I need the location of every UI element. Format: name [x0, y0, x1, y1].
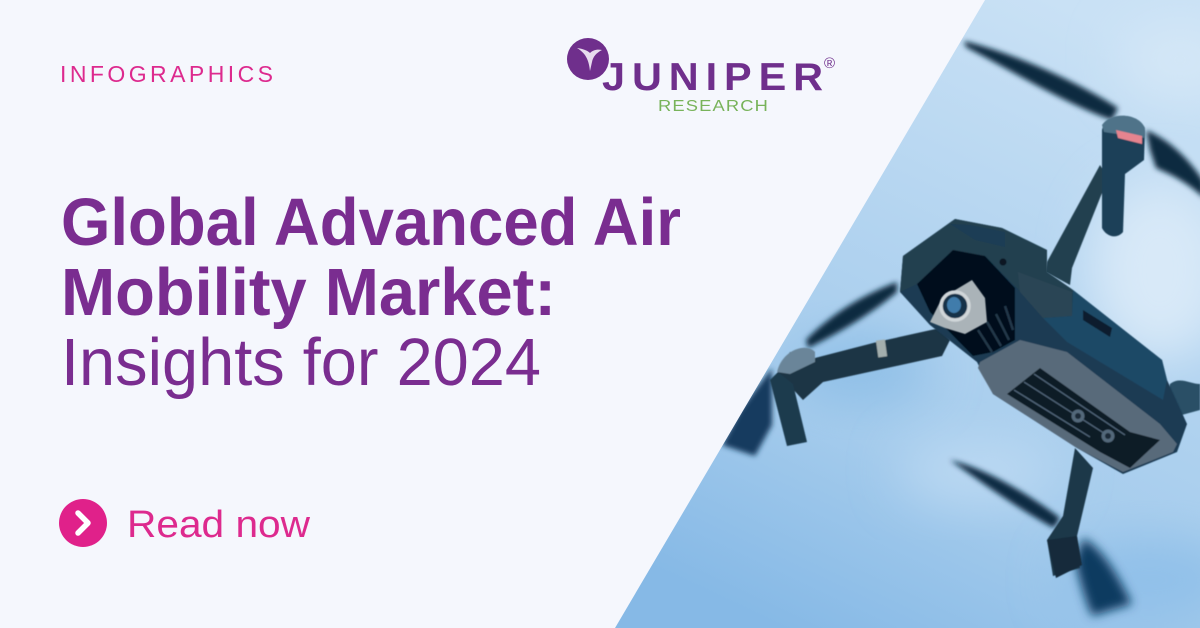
- panel: drone photo: [600, 0, 1200, 628]
- top shell: [900, 218, 1072, 291]
- blade bottom: [950, 460, 1060, 528]
- blade right: [1146, 130, 1200, 198]
- propeller blades, blurred: [722, 41, 1200, 616]
- drone body: [900, 219, 1187, 474]
- grille: [1007, 368, 1160, 468]
- title line 2: Mobility Market:: [61, 255, 556, 330]
- registered mark: ®: [824, 55, 835, 72]
- title: [61, 185, 681, 400]
- drone arms and motors: [770, 116, 1200, 578]
- label: infographics: INFOGRAPHICS: [60, 61, 273, 87]
- blade lower left: [722, 368, 772, 456]
- bottom plate: [978, 340, 1177, 472]
- blade left: [806, 282, 897, 348]
- read now link: Read now: [127, 504, 311, 546]
- title line 3: Insights for 2024: [61, 325, 541, 400]
- logo wordmark: JUNIPER: [602, 56, 830, 99]
- blade top: [964, 41, 1118, 120]
- blade bottom right: [1075, 538, 1132, 616]
- camera lens: [930, 280, 987, 334]
- logo subline: RESEARCH: [658, 98, 769, 115]
- logo mark: [567, 38, 609, 80]
- sky: [600, 0, 1200, 628]
- camera cavity: [917, 250, 1015, 356]
- logo: Juniper Research: [567, 38, 835, 115]
- body underlay: [900, 219, 1187, 474]
- title line 1: Global Advanced Air: [61, 185, 681, 260]
- icon: arrow button: [59, 499, 107, 547]
- call to action: [59, 499, 311, 547]
- side panel: [1043, 290, 1167, 400]
